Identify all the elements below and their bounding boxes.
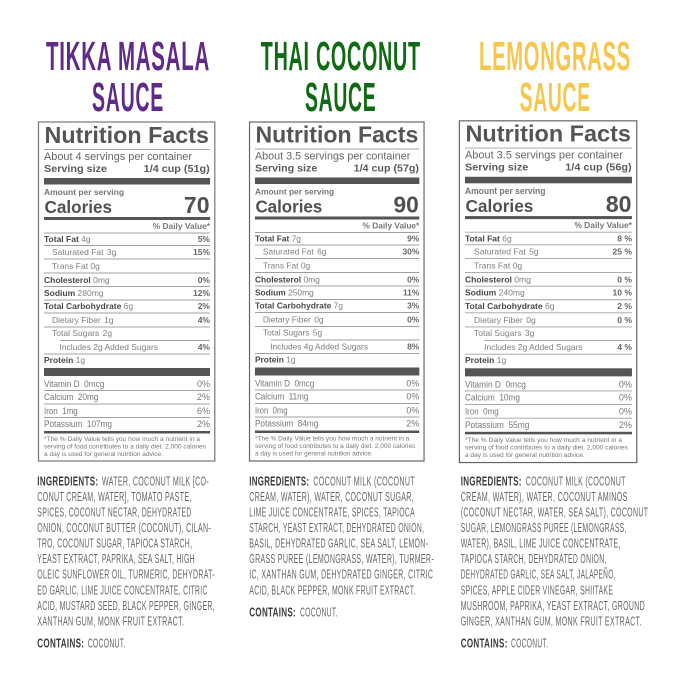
calories: 80 [606,191,631,217]
serving information: 1/4 cup (57g) [354,163,419,175]
vitamins and minerals: 2% [619,420,632,430]
ingredients: Tikka Masala: OLEIC SUNFLOWER OIL, TURMERIC, DEHYDRAT- [37,567,215,582]
ingredients: Tikka Masala: YEAST EXTRACT, PAPRIKA, SEA SALT, HIGH [37,551,195,566]
nutrition facts title: Nutrition Facts [465,120,631,146]
serving information [44,150,210,184]
nutrient table: 8% [407,341,420,352]
nutrient table: 4 % [617,342,632,352]
ingredients: Lemongrass: INGREDIENTS: [461,474,522,489]
nutrient table: 0% [198,275,210,285]
ingredients: Thai Coconut: LIME JUICE CONCENTRATE, SPICES, TAPIOCA [249,505,415,520]
vitamins and minerals: Calcium 11mg [255,391,308,402]
nutrient table: Saturated Fat 3g [52,247,117,257]
nutrient table: 11% [403,287,420,298]
ingredients: Thai Coconut: ACID, BLACK PEPPER, MONK FRUIT EXTRACT. [249,582,416,597]
calories: Amount per serving [44,187,124,197]
nutrient table: Total Carbohydrate 6g [465,301,555,311]
vitamins and minerals: Potassium 107mg [44,418,112,429]
vitamins and minerals: 2% [197,419,210,429]
nutrient table: 25 % [612,246,632,256]
nutrient table [255,232,420,376]
nutrient table: Includes 2g Added Sugars [484,342,583,352]
nutrient table: Includes 2g Added Sugars [60,342,158,352]
calories: Calories [465,196,534,216]
nutrient table: Sodium 240mg [465,288,525,298]
footnote: *The % Daily Value tells you how much a nutrient in a [44,436,200,443]
nutrient table: 4% [198,315,210,325]
ingredients: Tikka Masala: SPICES, COCONUT NECTAR, DEHYDRATED [37,505,192,520]
serving information: 1/4 cup (56g) [565,163,632,174]
nutrient table: 8 % [617,233,632,243]
nutrient table: Total Fat 6g [465,233,512,243]
calories: Calories [44,197,112,217]
nutrient table: Protein 1g [465,355,507,365]
ingredients: Tikka Masala: ONION, COCONUT BUTTER (COCONUT), CILAN- [37,520,211,535]
vitamins and minerals: 2% [406,418,419,429]
ingredients: Tikka Masala: XANTHAN GUM, MONK FRUIT EXTRACT. [37,614,184,629]
nutrient table: 15% [193,247,210,257]
footnote: serving of food contributes to a daily diet. 2,000 calories [44,444,206,450]
heading: Lemongrass Sauce: SAUCE [520,74,591,120]
nutrient table: Trans Fat 0g [474,260,522,271]
ingredients: Thai Coconut: IC, XANTHAN GUM, DEHYDRATED GINGER, CITRIC [249,567,433,582]
calories: % Daily Value* [363,220,420,231]
nutrient table: Sodium 280mg [44,288,104,298]
footnote [44,436,206,458]
vitamins and minerals: Iron 0mg [465,407,499,418]
vitamins and minerals: Potassium 84mg [255,418,318,429]
text: TIKKA MASALA [46,33,210,79]
calories: Amount per serving [255,186,334,197]
ingredients: Thai Coconut: STARCH, YEAST EXTRACT, DEHYDRATED ONION, [249,520,424,535]
vitamins and minerals [465,379,632,434]
nutrient table: Total Fat 4g [44,234,91,244]
nutrient table: 0 % [617,315,632,325]
serving information [465,148,632,183]
calories: Calories [255,196,322,217]
serving information [255,149,419,184]
nutrient table: Sodium 250mg [255,287,314,298]
serving information: Serving size [255,163,318,175]
contains: Tikka Masala: COCONUT. [88,636,126,651]
vitamins and minerals [44,378,210,434]
contains: Thai Coconut: COCONUT. [300,605,338,620]
nutrient table: 12% [193,288,210,298]
serving information: About 4 servings per container [44,151,192,163]
serving information: About 3.5 servings per container [255,150,411,163]
ingredients: Thai Coconut: CREAM, WATER), WATER, COCONUT SUGAR, [249,489,414,504]
nutrient table: 0% [407,314,420,325]
nutrient table: 2 % [617,301,632,311]
nutrient table: 10 % [612,288,632,298]
vitamins and minerals [255,378,419,433]
vitamins and minerals: 0% [406,405,419,416]
contains: Tikka Masala: CONTAINS: [37,636,84,651]
footnote: *The % Daily Value tells you how much a nutrient in a [255,435,410,443]
contains: Lemongrass: COCONUT. [511,636,548,651]
contains: Thai Coconut: CONTAINS: [249,605,296,620]
ingredients: Thai Coconut [249,474,434,620]
nutrient table: Protein 1g [44,355,85,365]
nutrient table: 0% [407,274,420,285]
nutrient table: Includes 4g Added Sugars [270,341,368,352]
ingredients: Thai Coconut: BASIL, DEHYDRATED GARLIC, SEA SALT, LEMON- [249,535,428,550]
ingredients: Lemongrass [461,474,648,651]
nutrition facts title: Nutrition Facts [255,121,418,148]
nutrient table: Total Sugars 2g [52,328,112,338]
nutrient table: 30% [402,246,420,257]
serving information: About 3.5 servings per container [465,150,623,162]
footnote: serving of food contributes to a daily diet. 2,000 calories [255,443,415,450]
ingredients: Tikka Masala [37,474,215,651]
vitamins and minerals: 0% [406,378,419,389]
ingredients: Tikka Masala: TRO, COCONUT SUGAR, TAPIOCA STARCH, [37,535,192,550]
footnote: *The % Daily Value tells you how much a nutrient in a [465,437,622,444]
nutrient table [44,233,210,376]
footnote: a day is used for general nutrition advice. [255,450,373,458]
nutrient table: 2% [198,301,210,311]
ingredients: Tikka Masala: ACID, MUSTARD SEED, BLACK PEPPER, GINGER, [37,598,215,613]
nutrient table: 4% [198,342,210,352]
heading: Tikka Masala Sauce: SAUCE [92,74,164,120]
nutrient table: 5% [198,234,210,244]
heading: Tikka Masala Sauce [46,33,210,120]
text: THAI COCONUT [261,33,421,79]
ingredients: Tikka Masala: CONUT CREAM, WATER], TOMATO PASTE, [37,489,192,504]
ingredients: Tikka Masala: WATER, COCONUT MILK [CO- [102,474,209,489]
nutrient table: Total Sugars 3g [474,328,535,338]
footnote [465,437,628,459]
nutrient table: Cholesterol 0mg [465,275,531,285]
heading: Thai Coconut Sauce [261,33,421,120]
nutrient table: Saturated Fat 6g [263,246,327,257]
calories: % Daily Value* [153,221,211,231]
nutrient table: 3% [407,300,420,311]
nutrient table: Dietary Fiber 1g [52,315,114,325]
vitamins and minerals: 0% [619,407,632,417]
nutrient table: Cholesterol 0mg [44,275,110,285]
ingredients: Thai Coconut: INGREDIENTS: [249,474,309,489]
nutrient table: Total Carbohydrate 6g [44,301,133,311]
vitamins and minerals: Iron 0mg [255,405,288,416]
calories: 90 [393,191,419,218]
nutrient table: Saturated Fat 5g [474,246,539,256]
nutrient table: Total Fat 7g [255,233,301,244]
nutrient table: 9% [407,233,420,244]
nutrient table: Trans Fat 0g [263,260,310,271]
ingredients: Tikka Masala: INGREDIENTS: [37,474,98,489]
vitamins and minerals: 2% [197,392,210,402]
vitamins and minerals: 0% [197,379,210,389]
vitamins and minerals: Vitamin D 0mcg [44,378,104,389]
ingredients: Tikka Masala: ED GARLIC, LIME JUICE CONCENTRATE, CITRIC [37,582,208,597]
vitamins and minerals: Iron 1mg [44,405,78,416]
serving information: 1/4 cup (51g) [144,164,210,175]
footnote [255,435,415,458]
vitamins and minerals: 6% [197,406,210,416]
calories [44,187,211,231]
nutrient table: Trans Fat 0g [52,261,100,271]
vitamins and minerals: Calcium 20mg [44,391,98,402]
panel: Lemongrass nutrition facts [459,120,637,463]
nutrient table: Dietary Fiber 0g [263,314,324,325]
footnote: a day is used for general nutrition advice. [44,451,163,458]
calories [255,186,420,231]
vitamins and minerals: 0% [619,393,632,403]
heading: Lemongrass Sauce [479,33,631,120]
nutrient table: Dietary Fiber 0g [474,315,536,325]
vitamins and minerals: Potassium 55mg [465,420,529,431]
calories: % Daily Value* [574,220,633,230]
calories: Amount per serving [465,186,545,196]
ingredients: Thai Coconut: GRASS PUREE (LEMONGRASS, WATER), TURMER- [249,551,434,566]
footnote: a day is used for general nutrition advice. [465,452,585,459]
nutrition facts title: Nutrition Facts [44,122,209,148]
vitamins and minerals: Vitamin D 0mcg [255,378,314,389]
footnote: serving of food contributes to a daily diet. 2,000 calories [465,444,628,451]
vitamins and minerals: 0% [406,391,419,402]
calories: 70 [184,192,210,218]
vitamins and minerals: Calcium 10mg [465,393,520,404]
nutrient table: 0 % [617,275,632,285]
ingredients: Thai Coconut: COCONUT MILK (COCONUT [313,474,415,489]
nutrient table: Cholesterol 0mg [255,274,320,285]
nutrient table: Total Carbohydrate 7g [255,300,343,311]
panel: Tikka Masala nutrition facts [38,122,215,461]
serving information: Serving size [465,163,529,174]
panel: Thai Coconut nutrition facts [250,121,424,461]
heading: Thai Coconut Sauce: SAUCE [305,74,376,120]
vitamins and minerals: 0% [619,379,632,389]
contains: Lemongrass: CONTAINS: [461,636,508,651]
nutrient table: Total Sugars 5g [263,327,323,338]
calories [465,186,633,230]
vitamins and minerals: Vitamin D 0mcg [465,379,526,390]
nutrient table [465,232,632,376]
nutrient table: Protein 1g [255,354,296,365]
serving information: Serving size [44,164,107,175]
